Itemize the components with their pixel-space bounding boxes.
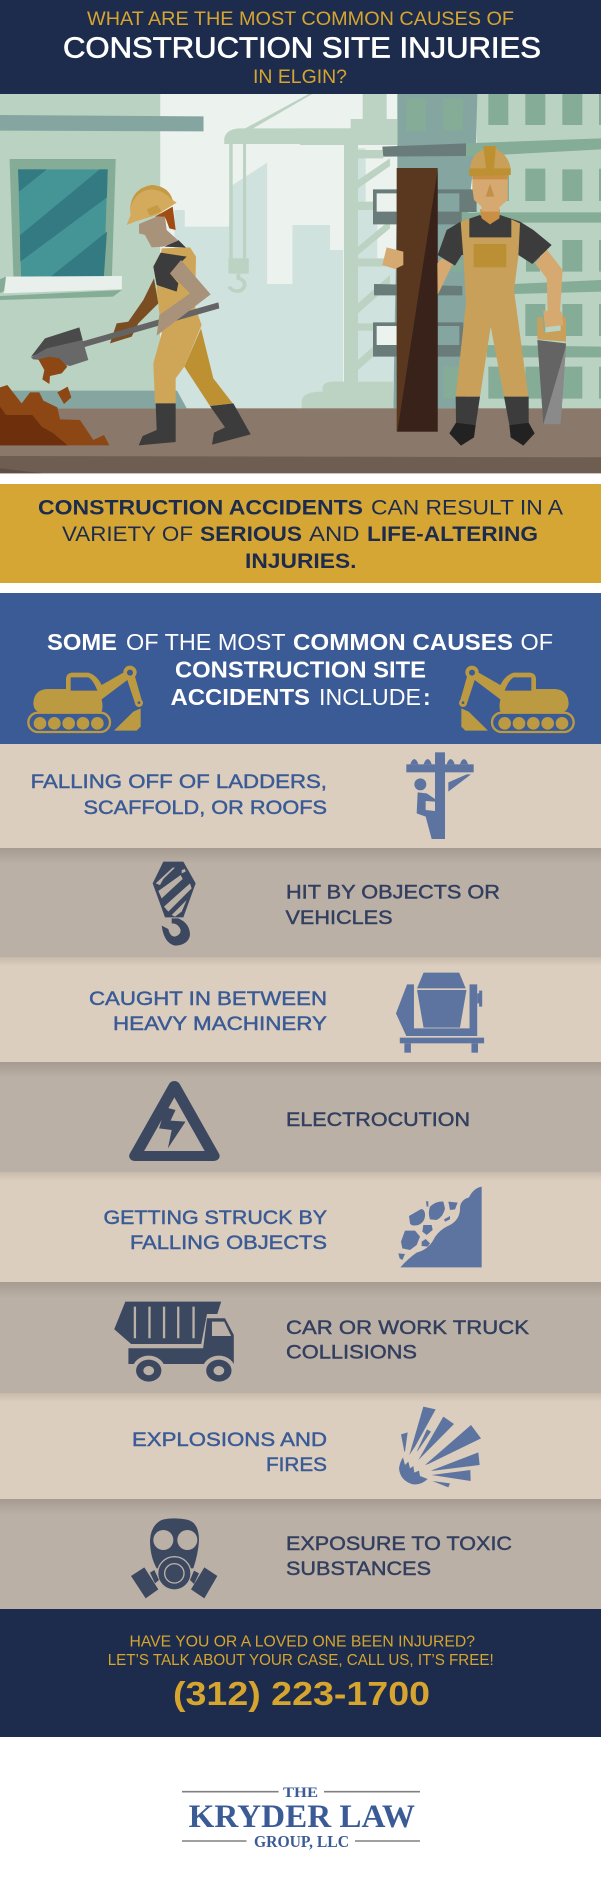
call to action text: HAVE YOU OR A LOVED ONE BEEN INJURED? <box>130 1634 475 1651</box>
heading text: OF <box>520 629 553 655</box>
icon: excavator left <box>28 666 143 732</box>
banner text: SERIOUS <box>200 522 302 546</box>
row text: FIRES <box>266 1455 327 1476</box>
heading text: : <box>423 684 431 710</box>
heading text: COMMON CAUSES <box>293 629 513 655</box>
call to action text line 2: LET’S TALK ABOUT YOUR CASE, CALL US, IT’S FREE! <box>108 1652 494 1669</box>
row text <box>132 1430 327 1476</box>
title line 3: IN ELGIN? <box>253 66 347 88</box>
banner text: AND <box>309 522 360 546</box>
heading text: OF THE MOST <box>126 629 286 655</box>
icon: crane hook <box>153 862 196 946</box>
row text: CAUGHT IN BETWEEN <box>89 989 327 1010</box>
banner text: VARIETY OF <box>62 522 193 546</box>
row: falling off ladders <box>0 744 601 848</box>
row text: COLLISIONS <box>286 1343 417 1364</box>
ground <box>0 408 601 473</box>
phone number: (312) 223-1700 <box>173 1675 430 1712</box>
row text: HEAVY MACHINERY <box>113 1014 327 1035</box>
row text: HIT BY OBJECTS OR <box>286 883 500 904</box>
row text: FALLING OBJECTS <box>130 1233 327 1254</box>
row text <box>31 772 327 819</box>
row text <box>286 1534 512 1580</box>
banner text: INJURIES. <box>245 549 356 573</box>
background left: skyline, crane and building <box>0 94 351 408</box>
heading text: INCLUDE <box>319 684 421 710</box>
row text: FALLING OFF OF LADDERS, <box>31 772 327 793</box>
digging worker with shovel and dirt pile <box>0 185 251 445</box>
icon: gas mask <box>131 1518 217 1598</box>
row text <box>89 989 327 1035</box>
gold banner <box>0 484 601 583</box>
banner text <box>38 496 564 573</box>
logo: The Kryder Law Group, LLC <box>182 1785 420 1851</box>
banner text: CAN RESULT IN A <box>371 496 564 520</box>
row: hit by objects <box>0 848 601 957</box>
row text: EXPOSURE TO TOXIC <box>286 1534 512 1555</box>
row: caught in machinery <box>0 957 601 1062</box>
row: truck collisions <box>0 1282 601 1393</box>
icon: explosion <box>399 1407 481 1487</box>
row text: SCAFFOLD, OR ROOFS <box>84 798 327 819</box>
heading text: SOME <box>47 629 117 655</box>
row text: SUBSTANCES <box>286 1559 431 1580</box>
row text: VEHICLES <box>286 908 392 929</box>
row text: EXPLOSIONS AND <box>132 1430 327 1451</box>
icon: worker climbing utility pole <box>406 752 474 839</box>
row text: CAR OR WORK TRUCK <box>286 1318 529 1339</box>
row text: ELECTROCUTION <box>286 1110 470 1131</box>
row: struck by falling objects <box>0 1172 601 1282</box>
logo word: group llc: GROUP, LLC <box>254 1832 349 1851</box>
icon: electrical hazard triangle <box>135 1086 214 1156</box>
hero illustration: construction workers <box>0 94 601 473</box>
heading text: CONSTRUCTION SITE <box>175 657 426 683</box>
icon: rockfall on slope <box>398 1187 482 1267</box>
icon: dump truck <box>114 1302 235 1384</box>
banner text: CONSTRUCTION ACCIDENTS <box>38 496 363 520</box>
icon: excavator right <box>459 666 574 732</box>
title line 2: CONSTRUCTION SITE INJURIES <box>63 32 541 64</box>
logo word: the: THE <box>283 1785 318 1801</box>
standing worker with saw and plank <box>382 146 566 446</box>
row text <box>286 883 500 929</box>
row: explosions and fires <box>0 1393 601 1499</box>
row: toxic substances <box>0 1499 601 1609</box>
blue section heading <box>0 593 601 744</box>
row text <box>104 1208 327 1254</box>
background right: crane mast, scaffold and buildings <box>300 94 601 408</box>
icon: cement mixer <box>396 973 484 1053</box>
heading text <box>47 629 553 710</box>
title line 1: WHAT ARE THE MOST COMMON CAUSES OF <box>87 8 514 30</box>
heading text: ACCIDENTS <box>170 684 310 710</box>
row: electrocution <box>0 1062 601 1172</box>
row text <box>286 1318 529 1364</box>
banner text: LIFE-ALTERING <box>367 522 538 546</box>
row text: GETTING STRUCK BY <box>104 1208 327 1229</box>
logo word: kryder law: KRYDER LAW <box>189 1799 415 1835</box>
call to action footer <box>0 1609 601 1737</box>
header: title <box>0 0 601 94</box>
